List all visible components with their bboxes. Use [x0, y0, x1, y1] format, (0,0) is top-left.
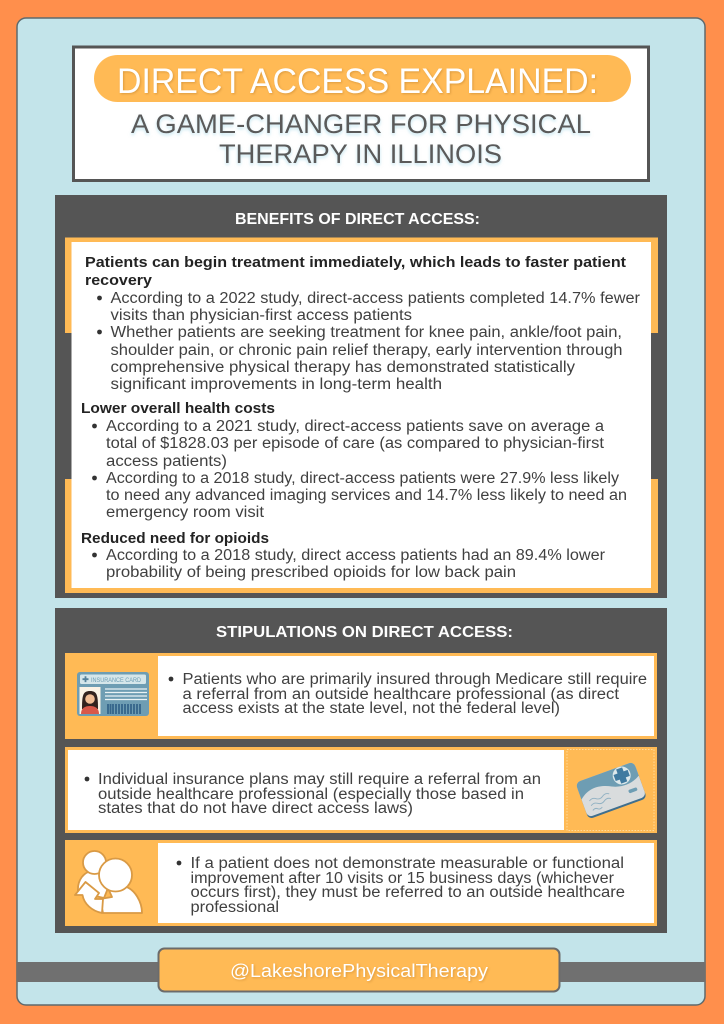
bullet text: improvement: If a patient does not demonstrate measurable or functional: [190, 855, 624, 872]
benefit: lower costs: According to a 2021 study, direct-access patients save on average a: [106, 418, 604, 435]
bullet text: medicare: access exists at the state level, not the federal level): [182, 700, 560, 717]
row: insurance plans: [65, 747, 657, 833]
subtitle: [131, 109, 591, 169]
footer band: [17, 962, 705, 982]
orange accent top: [65, 238, 658, 333]
benefit: faster recovery: According to a 2022 study, direct-access patients completed 14.7% fewer: [110, 290, 640, 307]
benefit: lower costs: According to a 2018 study, direct-access patients were 27.9% less likely: [106, 470, 619, 487]
benefits heading: BENEFITS OF DIRECT ACCESS:: [235, 211, 480, 228]
icon: insurance card: [77, 672, 149, 716]
benefit: faster recovery: shoulder pain, or chronic pain relief therapy, early intervention through: [110, 342, 622, 359]
subtitle: THERAPY IN ILLINOIS: [219, 139, 502, 169]
title frame: [74, 47, 648, 180]
benefit: reduced opioids: According to a 2018 study, direct access patients had an 89.4% lower: [106, 547, 605, 564]
benefit: faster recovery: recovery: [85, 272, 153, 289]
icon: health card: [575, 762, 647, 819]
icon: people with arrow: [75, 851, 142, 913]
bullet text: insurance plans: Individual insurance plans may still require a referral from an: [98, 771, 541, 788]
footer handle: [158, 948, 560, 992]
bullet text: improvement: [177, 855, 625, 916]
benefit: lower costs: emergency room visit: [106, 504, 265, 521]
benefit: reduced opioids: probability of being prescribed opioids for low back pain: [106, 564, 516, 581]
panel: stipulations on direct access: [55, 608, 667, 933]
bullet text: medicare: Patients who are primarily insured through Medicare still require: [182, 671, 647, 688]
benefit: faster recovery: [85, 254, 640, 393]
benefit: faster recovery: visits than physician-first access patients: [110, 307, 412, 324]
row: measurable improvement: [65, 840, 657, 926]
benefit: lower costs: Lower overall health costs: [81, 400, 275, 417]
benefit: lower costs: total of $1828.03 per episode of care (as compared to physician-first: [106, 435, 605, 452]
subtitle: A GAME-CHANGER FOR PHYSICAL: [131, 109, 591, 139]
bullet text: insurance plans: states that do not have direct access laws): [98, 800, 413, 817]
benefit: reduced opioids: [81, 530, 605, 581]
benefit: faster recovery: comprehensive physical therapy has demonstrated statistically: [110, 359, 575, 376]
benefit: reduced opioids: Reduced need for opioids: [81, 530, 269, 547]
stipulations heading: STIPULATIONS ON DIRECT ACCESS:: [216, 624, 513, 641]
bullet text: insurance plans: [85, 771, 541, 817]
bullet text: improvement: occurs first), they must be referred to an outside healthcare: [190, 884, 625, 901]
benefit: lower costs: [81, 400, 627, 521]
footer handle: @LakeshorePhysicalTherapy: [230, 960, 489, 981]
benefit: faster recovery: Patients can begin treatment immediately, which leads to faster patient: [85, 254, 626, 271]
bullet text: improvement: professional: [190, 899, 279, 916]
row: medicare: [65, 653, 657, 739]
bullet text: medicare: a referral from an outside healthcare professional (as direct: [182, 686, 620, 703]
title pill: [94, 55, 631, 102]
bullet text: improvement: improvement after 10 visits or 15 business days (whichever: [190, 870, 614, 887]
orange accent bottom: [65, 479, 658, 593]
main title: DIRECT ACCESS EXPLAINED:: [117, 62, 598, 101]
bullet text: medicare: [169, 671, 647, 717]
benefit: lower costs: access patients): [106, 453, 227, 470]
benefit: lower costs: to need any advanced imaging services and 14.7% less likely to need an: [106, 487, 627, 504]
title block: [74, 47, 648, 180]
icon: insurance card: INSURANCE CARD: [91, 678, 142, 684]
white content card: [72, 242, 651, 588]
bullet text: insurance plans: outside healthcare professional (especially those based in: [98, 786, 524, 803]
benefit: faster recovery: Whether patients are seeking treatment for knee pain, ankle/foot pain,: [110, 324, 622, 341]
panel: benefits of direct access: [55, 195, 667, 598]
benefit: faster recovery: significant improvements in long-term health: [110, 376, 442, 393]
